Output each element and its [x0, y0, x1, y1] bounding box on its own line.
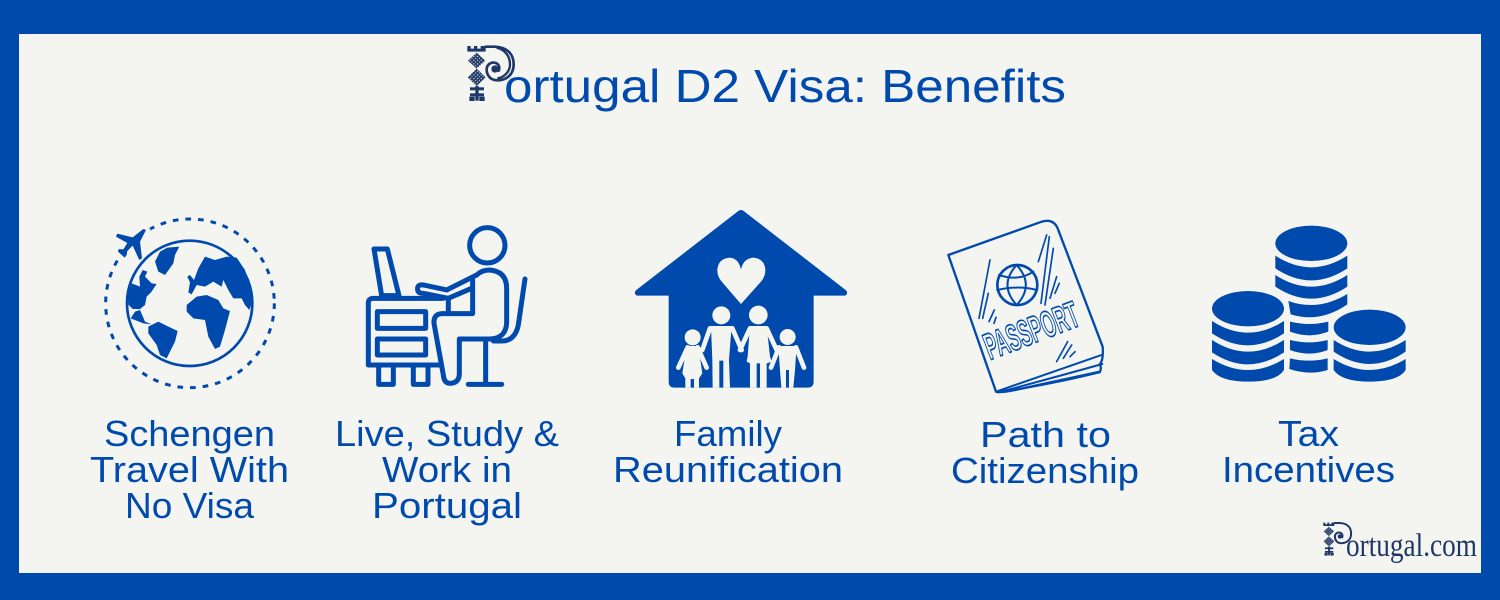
text block: Schengen Travel With No Visa: Schengen	[104, 413, 275, 454]
text block: Tax Incentives: Incentives	[1222, 449, 1395, 490]
text block: Live, Study & Work in Portugal: Work in	[382, 449, 512, 490]
text block: Family Reunification: Family	[674, 413, 782, 454]
icon: family in house	[635, 210, 847, 388]
logo: Portugal.com: ortugal.com	[1346, 528, 1477, 564]
text block: Live, Study & Work in Portugal: Portugal	[372, 485, 522, 526]
text block: Path to Citizenship: Citizenship	[951, 450, 1139, 491]
text block: Schengen Travel With No Visa: Travel With	[90, 449, 289, 490]
text block: Family Reunification: Reunification	[613, 449, 843, 490]
text block: Path to Citizenship: Path to	[980, 414, 1111, 455]
text block: Tax Incentives: Tax	[1278, 413, 1339, 454]
text block: Family Reunification	[613, 413, 843, 490]
logo: Portugal.com	[1323, 523, 1477, 564]
icon: ornamental P of the title logo	[467, 46, 514, 101]
title	[467, 46, 1066, 112]
icon: coin stacks	[1212, 226, 1406, 382]
icon: globe with plane	[106, 219, 274, 388]
icon: passport	[948, 221, 1103, 392]
text block: Schengen Travel With No Visa	[90, 413, 289, 526]
icon: ornamental P of the small logo	[1323, 523, 1351, 556]
title: ortugal D2 Visa: Benefits	[504, 60, 1066, 112]
text block: Live, Study & Work in Portugal	[335, 413, 559, 526]
text block: Tax Incentives	[1222, 413, 1395, 490]
text block: Path to Citizenship	[951, 414, 1139, 491]
text block: Schengen Travel With No Visa: No Visa	[125, 485, 255, 526]
icon: person working at desk	[368, 228, 525, 384]
text block: Live, Study & Work in Portugal: Live, Study &	[335, 413, 559, 454]
icon: passport: PASSPORT	[978, 293, 1085, 367]
